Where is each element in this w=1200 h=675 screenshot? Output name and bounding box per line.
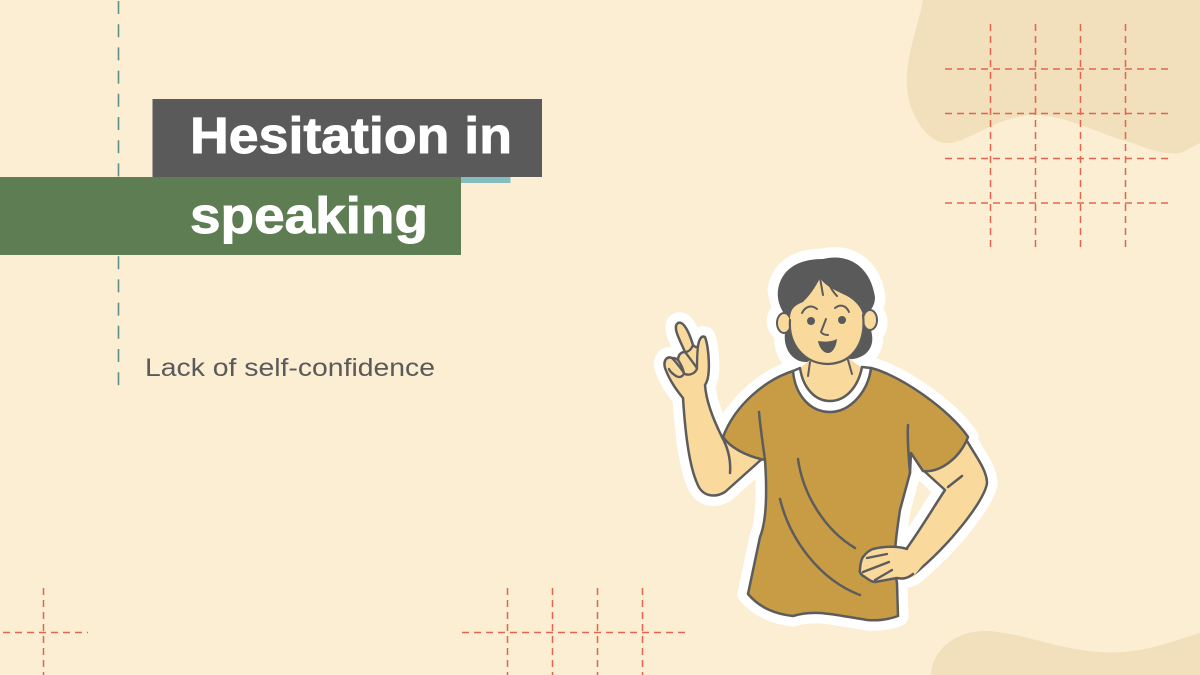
arm: raised, pointing [664,323,763,495]
face [790,278,863,364]
title line 2 [0,177,461,255]
dashed grid: bottom middle [462,588,688,675]
blob: top right [907,0,1200,153]
collar [793,367,871,412]
neck [800,358,862,401]
subtitle: Lack of self-confidence [145,354,435,382]
shirt folds [759,412,910,595]
blob: bottom right [931,631,1200,675]
title accent: teal bar [440,177,510,183]
eyes [807,317,815,325]
ears [777,310,877,333]
dashed grid: top right [945,24,1170,248]
dashed vertical line [118,0,120,387]
arm creases [722,437,962,487]
fringe strands [820,278,837,296]
title line 1 [152,99,542,177]
sticker halo [664,258,987,620]
hand on hip [860,547,925,582]
hair [778,258,875,362]
dashed grid: bottom left [3,588,88,675]
illustration: pointing person [664,258,987,620]
finger lines [669,345,698,377]
title line 2: speaking [190,187,428,244]
brows and nose [802,306,849,335]
shirt [723,368,968,620]
title line 1: Hesitation in [190,107,512,164]
arm: hand on hip [897,441,987,578]
mouth [818,339,837,353]
